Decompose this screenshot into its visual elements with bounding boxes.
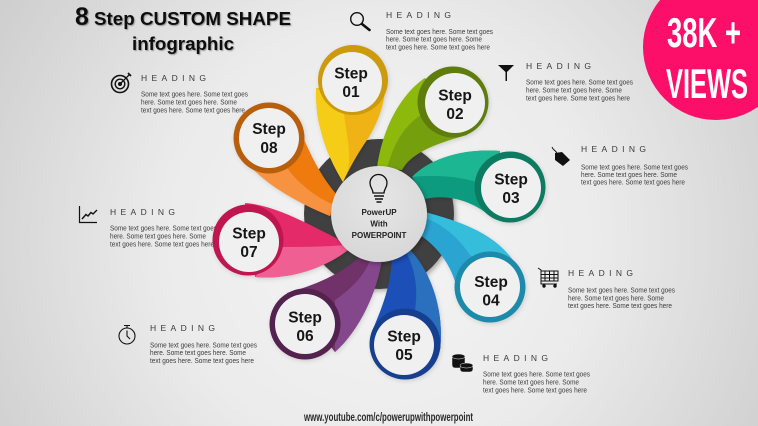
text block: step 03 xyxy=(581,144,688,186)
icon: light bulb xyxy=(370,174,387,202)
text block: step 07: Some text goes here. Some text goes xyxy=(110,226,217,232)
petal 07 xyxy=(212,203,348,277)
petal 01 xyxy=(316,45,388,182)
title xyxy=(75,3,291,54)
petal 03 xyxy=(412,150,546,222)
text block: step 04: HEADING xyxy=(568,268,633,278)
text block: step 01: Some text goes here. Some text goes xyxy=(386,29,493,36)
petal 06: 06 xyxy=(296,328,314,345)
petal 05: 05 xyxy=(395,347,413,364)
text block: step 08: Some text goes here. Some text goes xyxy=(141,92,248,98)
petal 01: 01 xyxy=(342,84,360,101)
text block: step 06: HEADING xyxy=(150,323,215,333)
text block: step 02 xyxy=(526,61,633,102)
text block: step 01: text goes here. Some text goes here xyxy=(386,44,490,52)
text block: step 08 xyxy=(141,73,248,114)
icon: stopwatch xyxy=(119,326,135,344)
text block: step 05: here. Some text goes here. Some xyxy=(483,380,579,386)
text block: step 02: Some text goes here. Some text goes xyxy=(526,80,633,86)
petal 04 xyxy=(420,212,526,322)
text block: step 01 xyxy=(386,10,493,52)
text block: step 01: here. Some text goes here. Some xyxy=(386,36,482,44)
text block: step 03: text goes here. Some text goes here xyxy=(581,180,685,186)
icon: target xyxy=(112,73,131,92)
icon: line chart xyxy=(80,206,97,222)
petal 08: Step xyxy=(252,121,286,138)
text block: step 06: text goes here. Some text goes here xyxy=(150,358,254,365)
text block: step 03: Some text goes here. Some text goes xyxy=(581,164,688,172)
centre hub xyxy=(331,166,427,262)
text block: step 04: text goes here. Some text goes here xyxy=(568,303,672,310)
text block: step 05: text goes here. Some text goes here xyxy=(483,388,587,394)
text block: step 05 xyxy=(483,353,590,394)
text block: step 04 xyxy=(568,268,675,310)
badge: 38K + views xyxy=(643,0,758,120)
text block: step 06: Some text goes here. Some text goes xyxy=(150,342,257,350)
hub label: POWERPOINT xyxy=(352,231,406,240)
icon: funnel xyxy=(498,65,514,81)
text block: step 05: HEADING xyxy=(483,353,548,363)
petal 06: Step xyxy=(288,310,322,326)
hub label: PowerUP xyxy=(361,208,397,217)
petal 01: Step xyxy=(334,66,368,82)
petal 02: Step xyxy=(438,88,472,104)
text block: step 08: text goes here. Some text goes here xyxy=(141,108,245,114)
text block: step 05: Some text goes here. Some text goes xyxy=(483,372,590,378)
petal 03: Step xyxy=(494,172,528,188)
petal 02 xyxy=(377,66,488,170)
petal 04: Step xyxy=(474,274,508,291)
text block: step 07: HEADING xyxy=(110,207,175,217)
petal 06 xyxy=(270,255,382,360)
text block: step 04: here. Some text goes here. Some xyxy=(568,296,664,302)
petal 05: Step xyxy=(387,328,421,346)
icon: price tag xyxy=(552,147,570,166)
icon: coins xyxy=(452,354,473,372)
petal 08 xyxy=(234,102,340,216)
petal 04: 04 xyxy=(482,292,500,310)
text block: step 04: Some text goes here. Some text goes xyxy=(568,288,675,294)
text block: step 06 xyxy=(150,323,257,365)
text block: step 02: HEADING xyxy=(526,61,591,71)
icon: shopping cart xyxy=(538,268,558,287)
text block: step 01: HEADING xyxy=(386,10,451,20)
text block: step 02: text goes here. Some text goes here xyxy=(526,96,630,102)
petal 05 xyxy=(370,250,441,380)
dark ring behind petals xyxy=(304,139,454,289)
text block: step 07: here. Some text goes here. Some xyxy=(110,234,206,240)
text block: step 07: text goes here. Some text goes here xyxy=(110,242,214,248)
petal 03: 03 xyxy=(502,190,520,207)
text block: step 08: HEADING xyxy=(141,73,206,83)
petal 07: Step xyxy=(232,226,266,242)
hub label: With xyxy=(370,220,388,228)
hub label xyxy=(352,208,406,240)
text block: step 08: here. Some text goes here. Some xyxy=(141,100,237,106)
title: infographic xyxy=(132,34,234,54)
title: Step CUSTOM SHAPE xyxy=(94,9,291,29)
petal 08: 08 xyxy=(260,140,278,157)
text block: step 03: HEADING xyxy=(581,144,646,154)
footer url: www.youtube.com/c/powerupwithpowerpoint xyxy=(303,412,473,424)
text block: step 06: here. Some text goes here. Some xyxy=(150,350,246,357)
title: 8 xyxy=(75,3,89,31)
petal 07: 07 xyxy=(240,244,258,261)
text block: step 07 xyxy=(110,207,217,248)
text block: step 03: here. Some text goes here. Some xyxy=(581,172,677,179)
text block: step 02: here. Some text goes here. Some xyxy=(526,88,622,94)
petal 02: 02 xyxy=(446,106,464,123)
icon: magnifier xyxy=(351,13,370,30)
